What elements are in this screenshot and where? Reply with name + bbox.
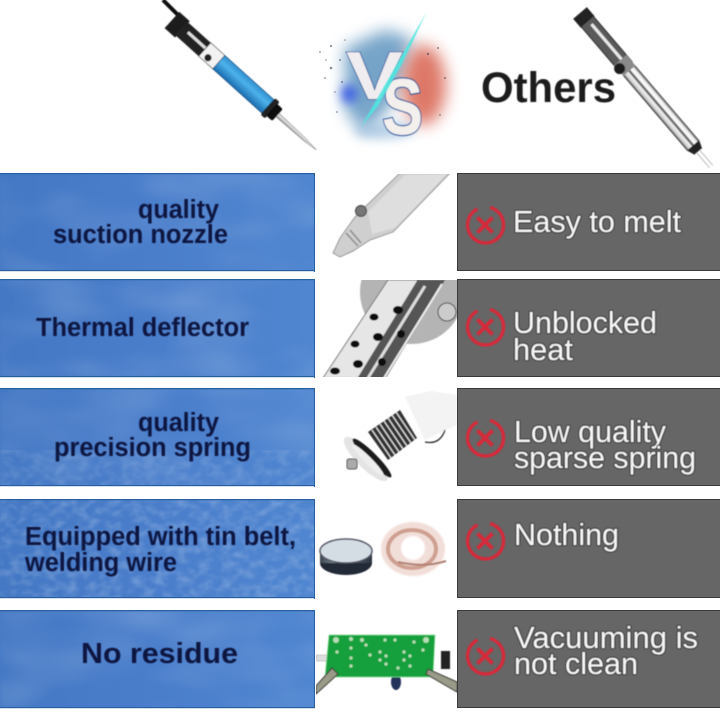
panel: our product column background xyxy=(0,173,315,708)
cyan slash xyxy=(361,13,426,127)
label: Equipped with tin belt, welding wire: Equipped with tin belt, xyxy=(25,523,296,551)
text: Low quality sparse spring xyxy=(514,414,696,475)
white gaps between rows xyxy=(0,272,315,610)
text: Vacuuming is not clean xyxy=(514,620,698,681)
red powder splash xyxy=(402,45,446,125)
icon: red cross, row 1 xyxy=(468,207,504,243)
image: suction nozzle xyxy=(333,173,450,257)
text: Easy to melt: Easy to melt xyxy=(513,204,681,239)
text: Unblocked heat: heat xyxy=(513,332,573,367)
text: Low quality sparse spring: sparse spring xyxy=(514,440,696,475)
icon: red cross, row 3 xyxy=(468,420,504,456)
text: Low quality sparse spring: Low quality xyxy=(514,414,666,449)
text: Unblocked heat xyxy=(513,305,657,367)
label: quality suction nozzle: suction nozzle xyxy=(53,221,228,249)
text: Vacuuming is not clean: Vacuuming is xyxy=(514,620,698,655)
label: quality suction nozzle: quality xyxy=(138,196,220,224)
label: quality precision spring xyxy=(54,409,251,462)
image: green circuit board with tweezers xyxy=(316,635,457,694)
icon: VS splash emblem xyxy=(319,13,446,151)
text: Vacuuming is not clean: not clean xyxy=(514,646,638,681)
VS lettering: S xyxy=(382,62,423,151)
label: Thermal deflector: Thermal deflector xyxy=(36,314,249,342)
icon: red cross, row 5 xyxy=(468,638,504,674)
heading: Others: Others xyxy=(481,64,616,112)
label: Equipped with tin belt, welding wire xyxy=(24,523,296,577)
text: Nothing: Nothing xyxy=(514,517,619,552)
VS lettering xyxy=(346,38,423,151)
VS lettering: V xyxy=(346,38,403,114)
label: quality suction nozzle xyxy=(53,196,228,249)
label: No residue: No residue xyxy=(81,638,238,670)
image: tin wire spool and copper braid xyxy=(320,522,446,576)
blue powder splash xyxy=(345,30,412,135)
text: Unblocked heat: Unblocked xyxy=(513,305,657,340)
panel: competitor column background xyxy=(458,174,720,708)
label: quality precision spring: quality xyxy=(138,409,220,437)
image: precision spring xyxy=(344,392,456,482)
icon: red cross, row 4 xyxy=(468,523,504,559)
icon: red cross, row 2 xyxy=(468,309,504,345)
icon: grey competitor desoldering iron xyxy=(571,7,718,174)
icon: blue desoldering iron xyxy=(163,0,324,158)
label: Equipped with tin belt, welding wire: welding wire xyxy=(24,549,177,577)
image: thermal deflector xyxy=(322,280,457,377)
label: quality precision spring: precision spring xyxy=(54,434,251,462)
